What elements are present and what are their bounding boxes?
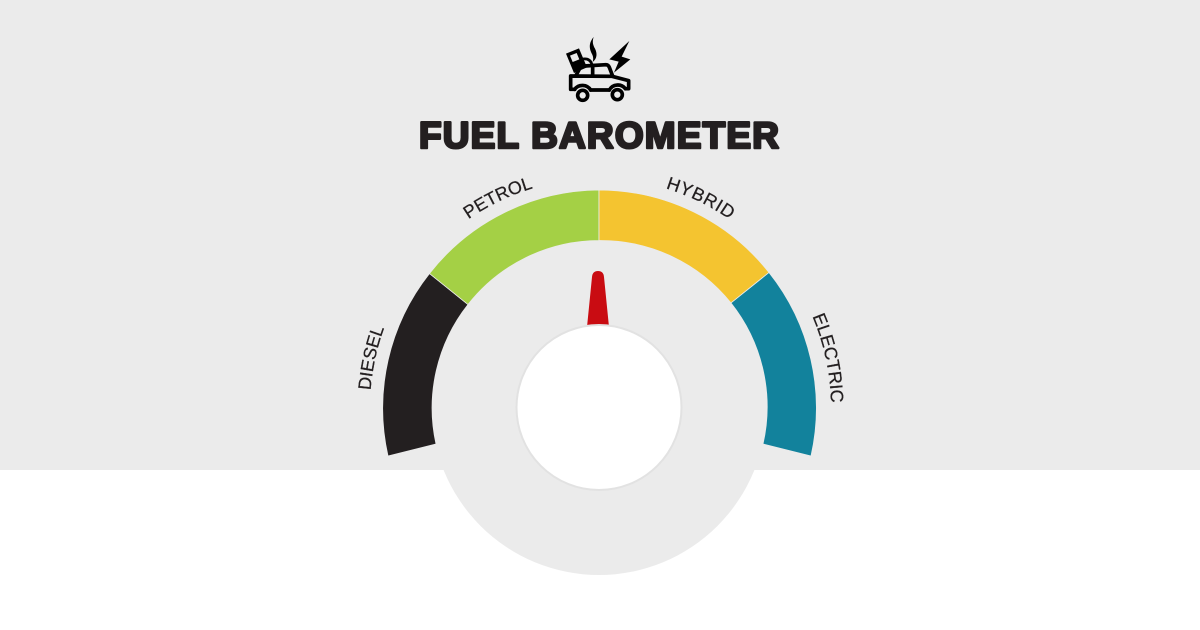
- segment: petrol: [430, 190, 599, 304]
- segment: electric: [731, 272, 816, 456]
- icon: car: [571, 65, 629, 100]
- icon: fuel pump: [566, 48, 592, 73]
- icon: flame: [590, 37, 597, 62]
- gauge segments: [383, 190, 816, 456]
- segment: diesel: [383, 274, 468, 456]
- gauge base disc: [432, 240, 766, 575]
- segment: hybrid: [599, 190, 769, 303]
- label: petrol: PETROL: [462, 178, 533, 219]
- title: FUEL BAROMETER: [419, 115, 779, 156]
- gauge needle: [587, 271, 609, 327]
- label: electric: ELECTRIC: [812, 312, 844, 402]
- gauge hub: [516, 325, 682, 490]
- icon: car with fuel pump, flame and lightning bolt: [566, 37, 630, 100]
- icon: lightning bolt: [609, 41, 630, 73]
- label: diesel: DIESEL: [358, 328, 384, 389]
- gauge labels: [358, 176, 844, 402]
- label: hybrid: HYBRID: [666, 176, 734, 217]
- grey header background: [0, 0, 1200, 470]
